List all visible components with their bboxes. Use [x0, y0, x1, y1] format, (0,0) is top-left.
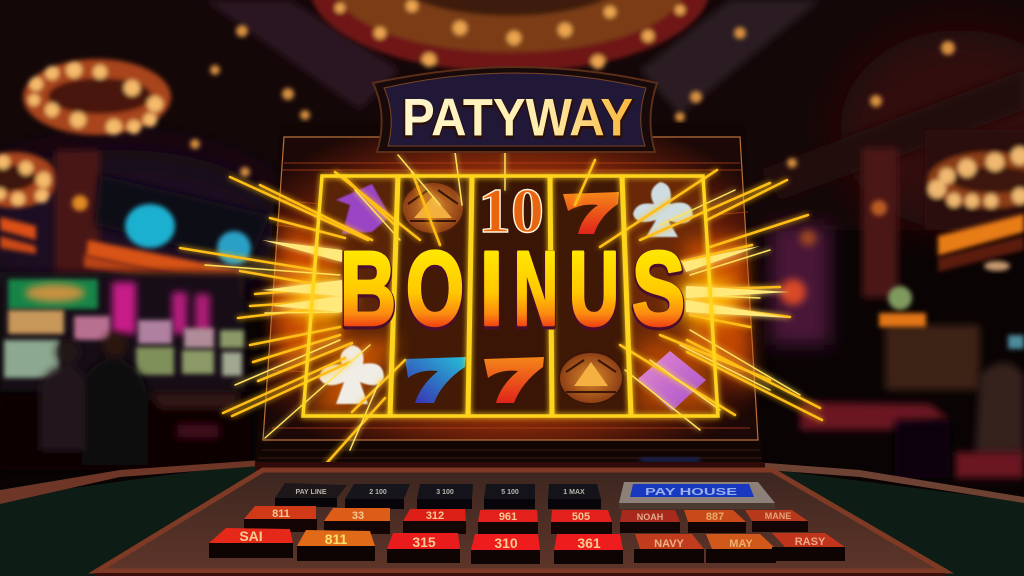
dark buttons row — [275, 483, 601, 509]
right ring light — [925, 130, 1024, 230]
red buttons row 2: MAY — [729, 538, 753, 550]
red buttons row 2: 315 — [412, 534, 436, 550]
backing band: B — [340, 232, 396, 349]
left lower ring light — [0, 152, 58, 208]
title sign: PATYWAY — [402, 88, 633, 148]
red buttons row 2: SAI — [239, 528, 263, 544]
reel 5 panel — [622, 176, 718, 416]
left patrons silhouettes — [0, 333, 250, 470]
reel window — [303, 176, 718, 416]
red buttons row 2: 310 — [494, 535, 518, 551]
light rays burst — [180, 152, 822, 465]
icon: purple gem — [336, 184, 390, 234]
backing band: N — [514, 232, 558, 349]
reel 2 panel — [390, 176, 472, 416]
game table right — [760, 468, 1024, 576]
right casino floor — [770, 148, 1024, 478]
gold letters — [340, 230, 685, 348]
table rims — [0, 458, 1024, 504]
reel symbols bottom row — [319, 345, 706, 411]
game table left — [0, 462, 262, 576]
red buttons row 2: 811 — [325, 531, 348, 547]
backing band: S — [632, 232, 685, 349]
gold letters: I — [480, 230, 503, 348]
red buttons row 2 — [209, 528, 845, 564]
backing band: U — [569, 232, 619, 349]
dark buttons row: 1 MAX — [563, 489, 585, 496]
gold letters: O — [406, 230, 464, 348]
red buttons row 1: 33 — [352, 510, 364, 522]
dark buttons row: PAY LINE — [296, 489, 327, 496]
backing band: I — [480, 232, 503, 349]
blue display panel — [619, 482, 775, 509]
sign text: PATYWAY — [401, 90, 634, 149]
bright streaks beside the headline — [262, 240, 790, 318]
reel frame and dividers — [303, 176, 718, 416]
red buttons row 2: RASY — [795, 536, 826, 548]
red buttons row 1: 312 — [426, 510, 444, 522]
number 10: 10 — [478, 175, 544, 246]
bonus headline — [340, 230, 685, 349]
red buttons row 1: 961 — [499, 511, 517, 523]
gold letters: B — [340, 230, 396, 348]
icon: blue seven — [405, 357, 466, 403]
icon: red seven — [484, 357, 544, 403]
icon: red seven — [563, 192, 619, 234]
blue display panel: PAY HOUSE — [645, 487, 738, 498]
dark buttons row: 3 100 — [436, 489, 454, 496]
left ring light — [23, 59, 171, 135]
left casino floor: slot machines — [0, 150, 270, 392]
red buttons row 2: NAVY — [654, 538, 685, 550]
backing band — [340, 232, 685, 349]
burst glow — [272, 225, 752, 410]
icon: bronze medallion — [559, 352, 623, 404]
reel symbols top row — [336, 175, 693, 246]
reel 1 panel — [303, 176, 398, 416]
red buttons row 2: 361 — [577, 535, 601, 551]
reel 3 panel — [468, 176, 552, 416]
dark buttons row: 2 100 — [369, 489, 387, 496]
red buttons row 1: 887 — [706, 511, 724, 523]
icon: silver club — [633, 182, 693, 237]
title sign — [373, 67, 657, 152]
red buttons row 1: 505 — [572, 511, 590, 523]
red buttons row 1: NOAH — [637, 512, 663, 522]
reel 4 panel — [550, 176, 631, 416]
icon: pink diamond — [638, 351, 706, 411]
icon: bronze medallion — [402, 182, 464, 234]
gold letters: S — [632, 230, 685, 348]
icon: white club — [319, 345, 384, 404]
red buttons row 1: MANE — [765, 511, 791, 521]
gold letters: U — [569, 230, 619, 348]
dark buttons row: 5 100 — [501, 489, 519, 496]
red buttons row 1 — [244, 506, 808, 534]
slot machine cabinet — [255, 123, 762, 464]
control deck — [95, 462, 945, 576]
backing band: O — [406, 232, 464, 349]
red buttons row 1: 811 — [272, 508, 290, 520]
gold letters: N — [514, 230, 558, 348]
ceiling chandelier — [190, 0, 955, 177]
